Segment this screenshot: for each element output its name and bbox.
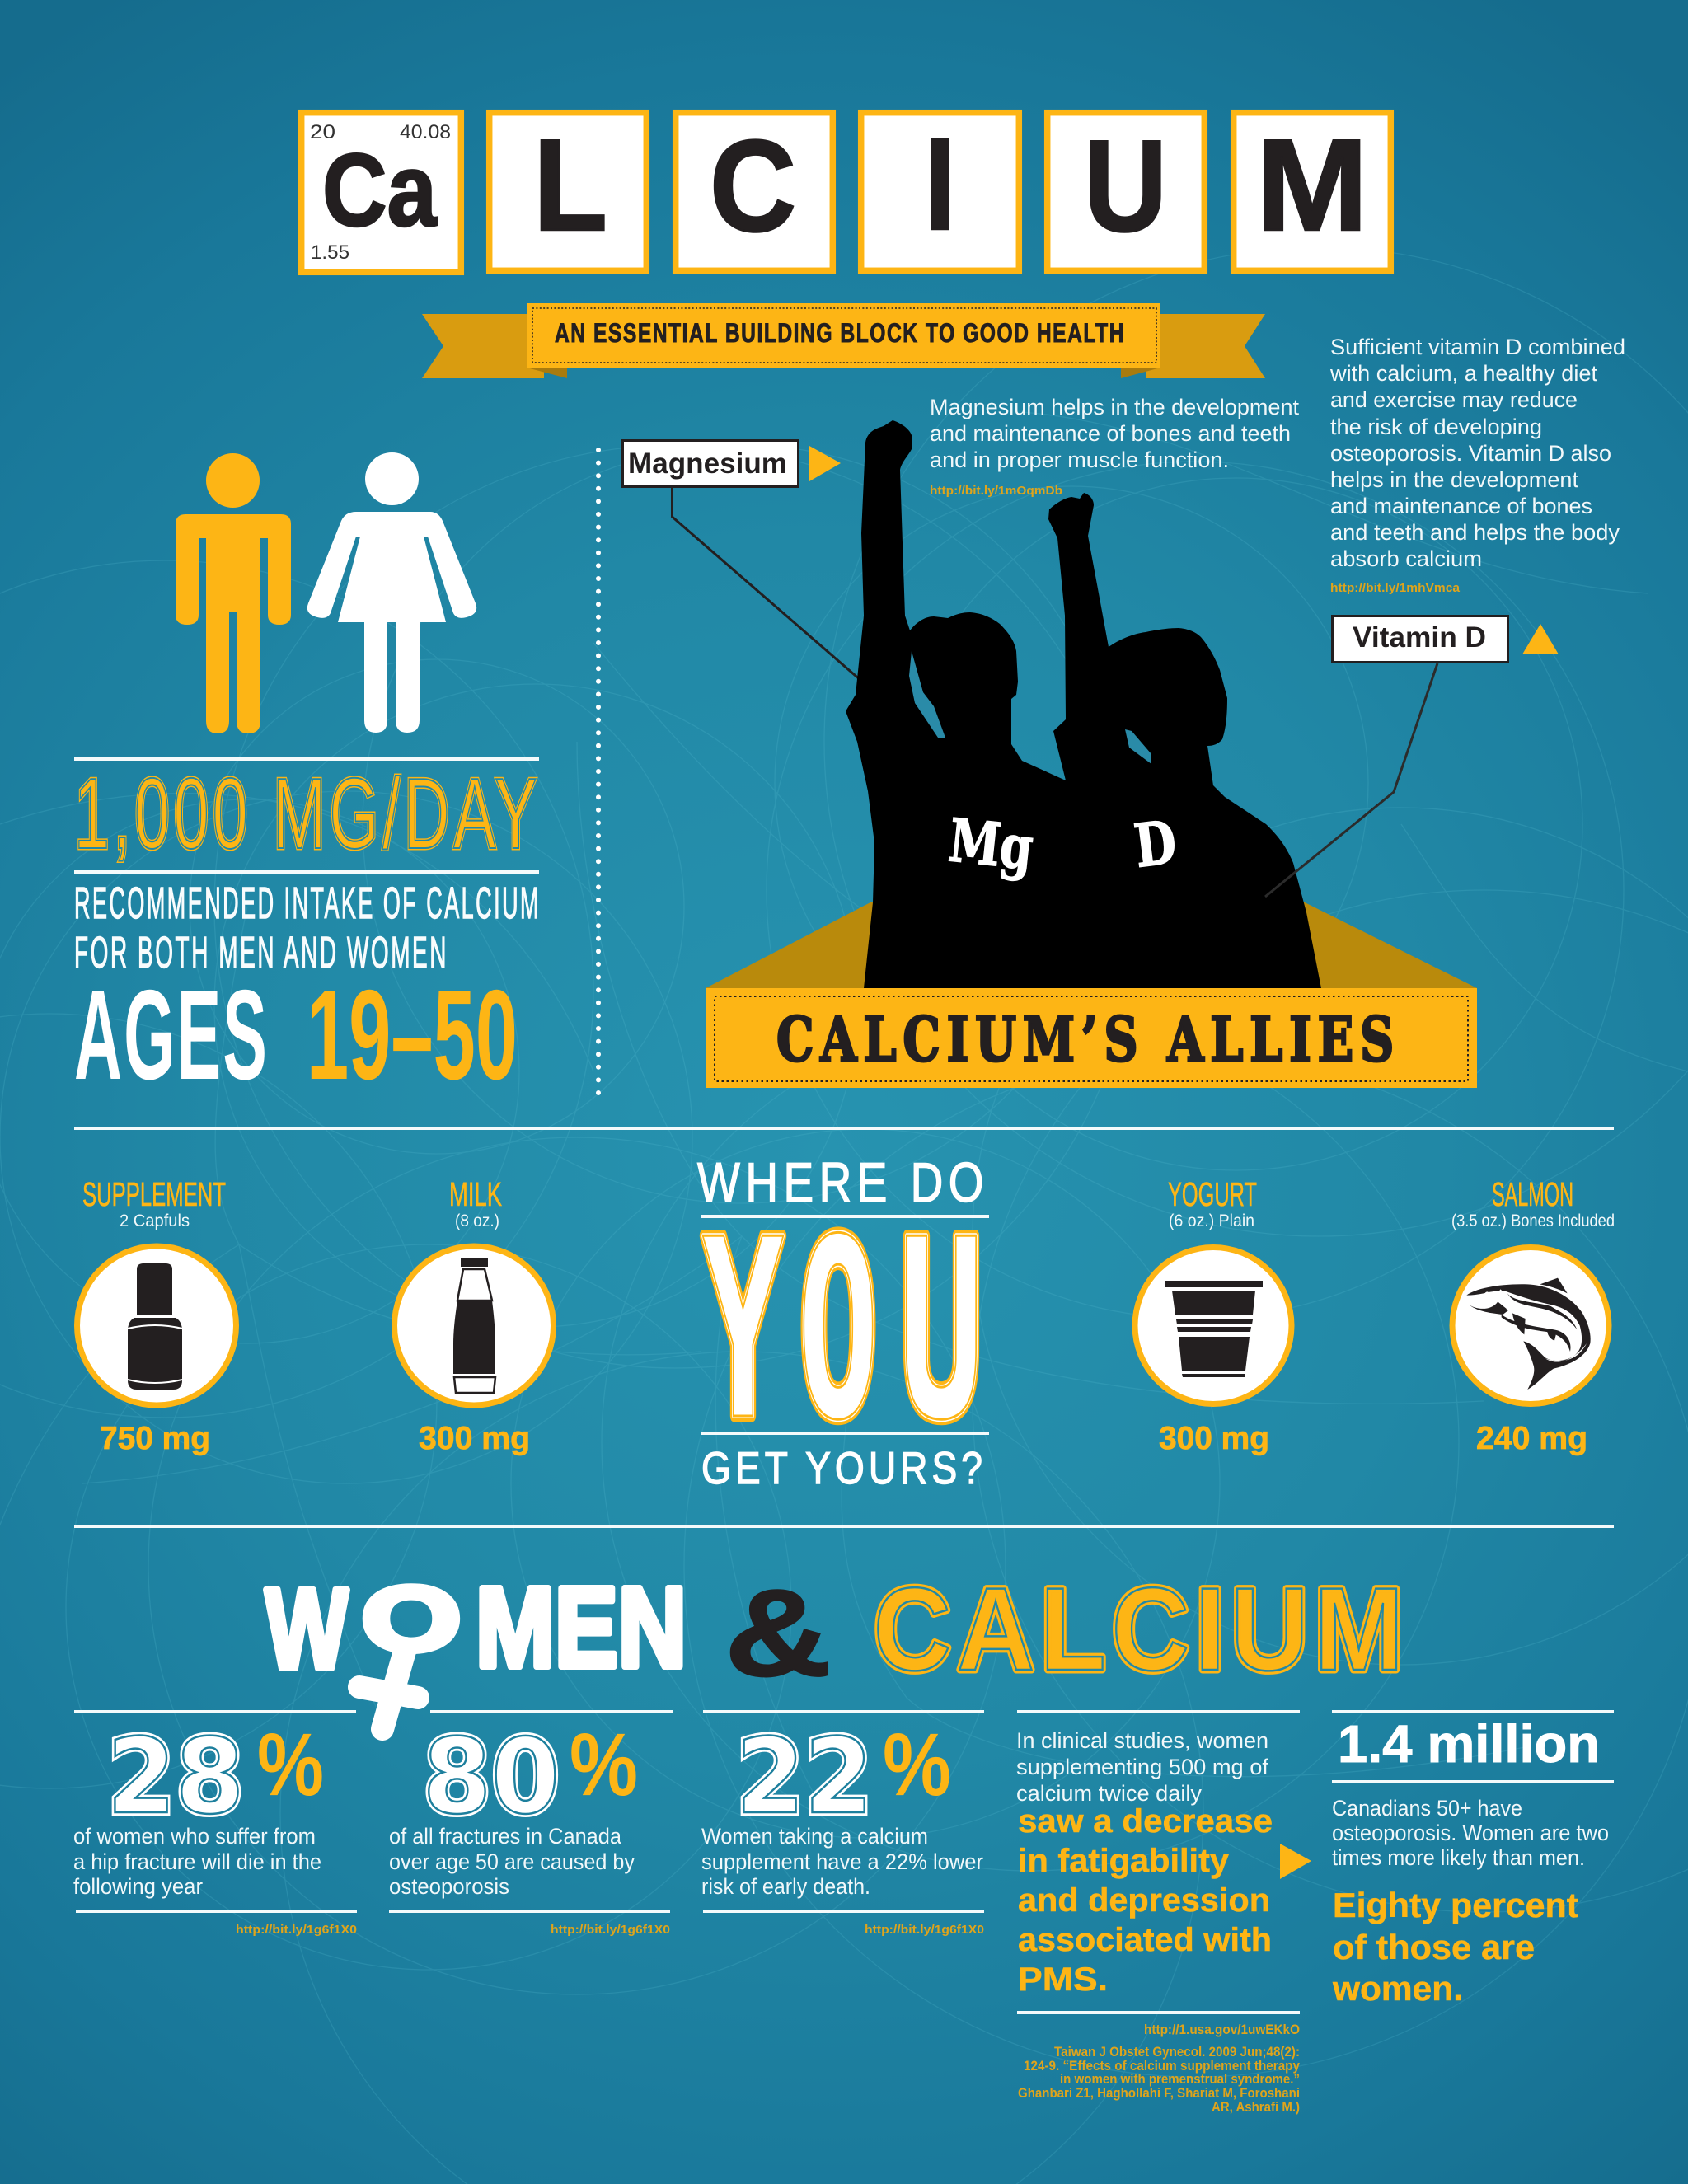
panel: clinical studies: PMS.	[1018, 1961, 1108, 1998]
panel: clinical studies: and depression	[1018, 1882, 1270, 1919]
panel: clinical studies: supplementing 500 mg of	[1016, 1755, 1268, 1779]
panel: calcium's allies	[623, 335, 1625, 1088]
text: YOU: U	[899, 1187, 983, 1474]
panel: food source salmon: 240 mg	[1476, 1421, 1587, 1456]
text: vitamin D: Sufficient vitamin D combined	[1330, 335, 1625, 359]
text: YOU: U	[899, 1187, 983, 1474]
panel: food source salmon	[1451, 1175, 1615, 1456]
panel: clinical studies: In clinical studies, women	[1016, 1728, 1268, 1753]
stat: 28%: of women who suffer from	[73, 1824, 316, 1849]
text: recommended intake	[74, 879, 541, 977]
text: magnesium: Magnesium helps in the development	[930, 395, 1300, 419]
panel: food source milk: (8 oz.)	[455, 1212, 499, 1230]
arrow: vitamin D	[1522, 624, 1559, 654]
banner: subtitle ribbon: AN ESSENTIAL BUILDING BLOCK TO GOOD HEALTH	[555, 318, 1125, 348]
leader line: vitamin D	[1265, 663, 1437, 897]
arrow: clinical to osteoporosis	[1280, 1844, 1311, 1879]
heading: 1,000 mg/day: 1,000 MG/DAY	[74, 757, 541, 869]
stat: 22%: %	[883, 1714, 951, 1814]
text: recommended intake: FOR BOTH MEN AND WOMEN	[74, 928, 448, 977]
panel: clinical studies: associated with	[1018, 1922, 1272, 1958]
stat: 80%: of all fractures in Canada	[389, 1824, 622, 1849]
stat: 22%: 22	[736, 1716, 873, 1837]
text: YOU	[702, 1187, 983, 1474]
text: women with venus symbol: MEN	[476, 1564, 687, 1691]
stat: 22%: risk of early death.	[701, 1874, 870, 1899]
panel: 1.4 million: of those are	[1333, 1928, 1535, 1966]
panel: clinical studies: calcium twice daily	[1016, 1781, 1202, 1806]
tile: Ca element: 40.08	[400, 121, 451, 143]
tile: L: L	[533, 113, 607, 258]
icon: woman	[307, 452, 476, 733]
text: vitamin D	[1329, 335, 1625, 595]
stat: 28%: a hip fracture will die in the	[73, 1849, 321, 1874]
icon: milk bottle	[394, 1246, 554, 1405]
label box: Vitamin D: Vitamin D	[1353, 621, 1486, 654]
text: YOU: Y	[702, 1187, 785, 1474]
tile: L	[490, 113, 646, 270]
text: vitamin D: and teeth and helps the body	[1330, 520, 1620, 545]
panel: recommended intake	[74, 452, 541, 1106]
stat: 28%: %	[257, 1714, 324, 1814]
tile: U: U	[1084, 114, 1167, 259]
panel: clinical studies: http://1.usa.gov/1uwEKkO	[1144, 2022, 1300, 2037]
heading: calcium's allies	[706, 988, 1477, 1088]
stat: 80%: %	[570, 1714, 638, 1814]
stat: 80%: 80	[423, 1716, 560, 1837]
text: magnesium	[930, 395, 1300, 498]
panel: 1.4 million	[1332, 1712, 1614, 2008]
heading: where do you get yours: GET YOURS?	[701, 1442, 987, 1493]
panel: food source yogurt	[1135, 1175, 1292, 1456]
label: Mg: Mg	[945, 804, 1037, 883]
text: YOU: Y	[702, 1187, 785, 1474]
panel: 1.4 million: 1.4 million	[1338, 1714, 1600, 1774]
panel: 1.4 million: osteoporosis. Women are two	[1332, 1821, 1609, 1845]
title: CALCIUM periodic tiles	[302, 112, 1390, 272]
tile: C	[676, 113, 832, 270]
text: vitamin D: helps in the development	[1330, 467, 1579, 492]
text: YOU: O	[798, 1187, 879, 1474]
heading: women and calcium	[265, 1563, 1409, 1729]
stat: 28%: 28	[107, 1716, 244, 1837]
tile: Ca element	[302, 113, 461, 272]
tile: I	[861, 112, 1019, 270]
panel: 1.4 million: Canadians 50+ have	[1332, 1796, 1522, 1821]
panel: clinical studies: 124-9. “Effects of calcium supplement therapy	[1024, 2059, 1301, 2074]
heading: 1,000 mg/day	[74, 757, 541, 869]
label box: Vitamin D	[1332, 616, 1508, 663]
text: vitamin D: the risk of developing	[1330, 415, 1542, 439]
heading: where do you get yours: WHERE DO	[697, 1151, 989, 1214]
stat: 22%	[701, 1712, 984, 1937]
stat: 22%: http://bit.ly/1g6f1X0	[865, 1924, 984, 1937]
text: vitamin D: with calcium, a healthy diet	[1329, 361, 1598, 386]
panel: clinical studies	[1016, 1712, 1301, 2115]
text: ampersand: &	[724, 1563, 832, 1702]
stat: 28%: http://bit.ly/1g6f1X0	[236, 1924, 357, 1937]
icon: salmon	[1452, 1248, 1609, 1404]
tile: M: M	[1256, 113, 1368, 258]
text: vitamin D: and maintenance of bones	[1330, 494, 1592, 518]
stat: 80%: http://bit.ly/1g6f1X0	[551, 1924, 670, 1937]
panel: clinical studies: saw a decrease	[1018, 1803, 1273, 1840]
text: magnesium: http://bit.ly/1mOqmDb	[930, 485, 1062, 498]
label: D: D	[1131, 806, 1180, 881]
panel: 1.4 million: women.	[1332, 1969, 1463, 2008]
stat: 22%: Women taking a calcium	[701, 1824, 928, 1849]
tile: Ca element: Ca	[322, 134, 438, 248]
text: vitamin D: absorb calcium	[1330, 546, 1482, 571]
text: vitamin D: osteoporosis. Vitamin D also	[1330, 441, 1611, 466]
heading: calcium's allies: CALCIUM’S ALLIES	[776, 1005, 1400, 1076]
arrow: magnesium	[809, 446, 841, 481]
tile: I: I	[924, 112, 956, 257]
panel: 1.4 million: times more likely than men.	[1332, 1845, 1585, 1870]
text: calcium: CALCIUM	[874, 1564, 1409, 1695]
label box: Magnesium	[623, 440, 798, 486]
panel: food source salmon: (3.5 oz.) Bones Included	[1451, 1212, 1615, 1230]
panel: 1.4 million: Eighty percent	[1333, 1886, 1578, 1924]
panel: clinical studies: Taiwan J Obstet Gynecol. 2009 Jun;48(2):	[1054, 2045, 1300, 2060]
text: magnesium: and in proper muscle function.	[930, 448, 1229, 472]
text: YOU: O	[798, 1187, 879, 1474]
text: women with venus symbol: W	[265, 1566, 349, 1693]
panel: food source yogurt: (6 oz.) Plain	[1169, 1212, 1254, 1230]
icon: supplement bottle	[77, 1246, 236, 1405]
panel: clinical studies: AR, Ashrafi M.)	[1212, 2100, 1300, 2115]
icon: man	[176, 453, 291, 733]
panel: food source supplement: 2 Capfuls	[120, 1212, 190, 1230]
text: YOU: Y	[702, 1187, 785, 1474]
panel: food source milk: MILK	[449, 1175, 502, 1213]
panel: food source yogurt: 300 mg	[1159, 1421, 1269, 1456]
stat: 28%: 28	[107, 1716, 244, 1837]
silhouette: two raised-fist figures	[846, 420, 1321, 988]
text: magnesium: and maintenance of bones and teeth	[930, 421, 1291, 446]
text: vitamin D: and exercise may reduce	[1330, 387, 1578, 412]
heading: where do you get yours	[697, 1151, 989, 1493]
panel: clinical studies: Ghanbari Z1, Haghollahi F, Shariat M, Foroshani	[1018, 2086, 1300, 2101]
tile: Ca element: 20	[310, 121, 335, 143]
stat: 28%	[73, 1712, 357, 1937]
text: women with venus symbol	[265, 1564, 687, 1729]
tile: U	[1048, 113, 1204, 270]
panel: food source supplement	[77, 1175, 236, 1456]
text: RECOMMENDED INTAKE OF CALCIUM	[74, 879, 541, 928]
leader line: magnesium	[673, 488, 861, 681]
label box: Magnesium: Magnesium	[628, 448, 787, 480]
tile: C: C	[710, 114, 796, 259]
panel: food source supplement: SUPPLEMENT	[82, 1175, 226, 1213]
gold backing shape	[706, 902, 1477, 988]
divider dotted	[596, 450, 601, 1100]
panel: food source salmon: SALMON	[1492, 1175, 1573, 1213]
stat: 80%: 80	[423, 1716, 560, 1837]
heading: 1,000 mg/day: 1,000 MG/DAY	[74, 757, 541, 869]
tile: M	[1234, 113, 1390, 270]
text: YOU: O	[798, 1187, 879, 1474]
text: women with venus symbol: O	[362, 1568, 461, 1670]
text: calcium: CALCIUM	[874, 1564, 1409, 1695]
panel: food source yogurt: YOGURT	[1168, 1175, 1257, 1213]
stat: 22%: 22	[736, 1716, 873, 1837]
icon: yogurt cup	[1135, 1248, 1292, 1404]
stat: 80%: osteoporosis	[389, 1874, 509, 1899]
stat: 80%	[389, 1712, 673, 1937]
text: ages 19-50: 19–50	[307, 963, 518, 1106]
banner: subtitle ribbon	[422, 303, 1265, 378]
text: vitamin D: http://bit.ly/1mhVmca	[1330, 582, 1461, 595]
panel: food source milk: 300 mg	[419, 1421, 530, 1456]
panel: food source milk	[394, 1175, 554, 1456]
stat: 22%: supplement have a 22% lower	[701, 1849, 983, 1874]
text: ages 19-50: AGES	[74, 963, 269, 1106]
panel: clinical studies: in women with premenstrual syndrome.”	[1060, 2072, 1300, 2087]
stat: 80%: over age 50 are caused by	[389, 1849, 635, 1874]
panel: food source supplement: 750 mg	[100, 1421, 210, 1456]
stat: 28%: following year	[73, 1874, 203, 1899]
panel: clinical studies: in fatigability	[1018, 1843, 1230, 1879]
text: YOU: U	[899, 1187, 983, 1474]
tile: Ca element: 1.55	[311, 241, 349, 264]
